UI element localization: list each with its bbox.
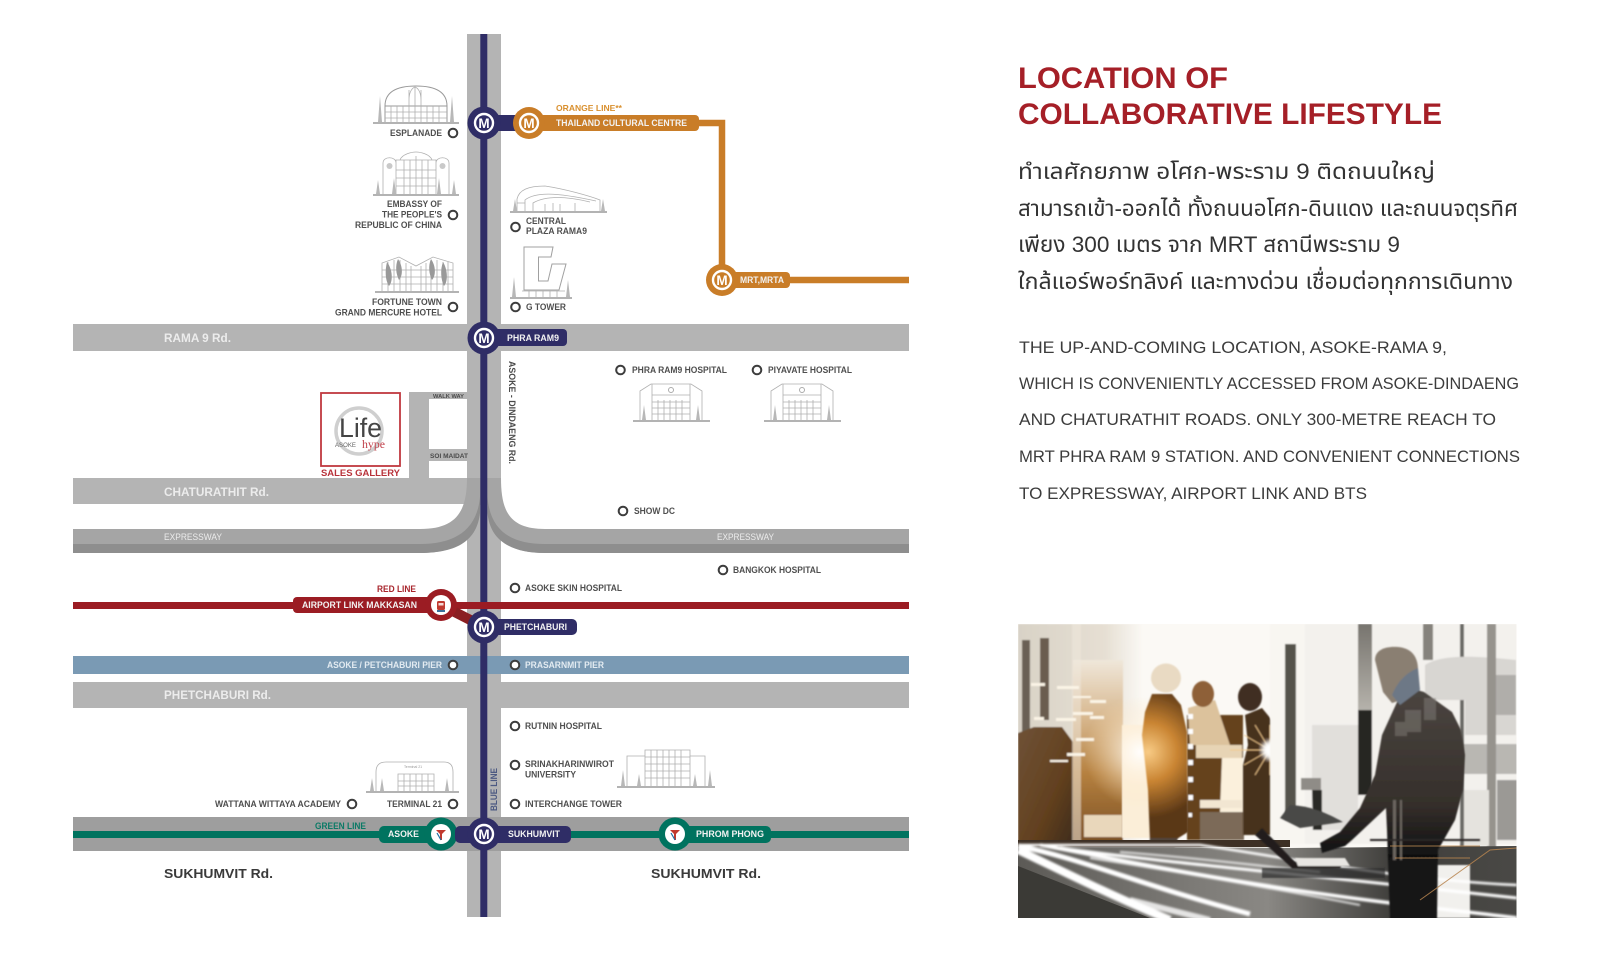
- text block: Thai description: สามารถเข้า-ออกได้ ทั้งถนนอโศก-ดินแดง และถนนจตุรทิศ: [1018, 194, 1518, 222]
- label: Bangkok Hospital: BANGKOK HOSPITAL: [733, 565, 821, 575]
- station: Phrom Phong: PHROM PHONG: [696, 829, 764, 839]
- label: Piyavate Hospital: PIYAVATE HOSPITAL: [768, 365, 852, 375]
- station: Phetchaburi: [468, 610, 577, 644]
- road: Sukhumvit: [73, 817, 909, 851]
- text block: Thai description: [1018, 159, 1518, 295]
- label: Central Plaza Rama9: [511, 216, 587, 236]
- photo: right background: [1270, 624, 1517, 849]
- icon: G Tower building: [510, 247, 572, 298]
- label: Prasarnmit Pier: PRASARNMIT PIER: [525, 660, 604, 670]
- label: Embassy: THE PEOPLE'S: [382, 210, 442, 220]
- station: Sukhumvit: [455, 818, 571, 850]
- photo: man with laptop silhouette: [1320, 647, 1480, 920]
- photo: left skyline: [1018, 624, 1133, 840]
- station: Thailand Cultural Centre: ORANGE LINE**: [556, 103, 623, 113]
- station: Airport Link Makkasan: AIRPORT LINK MAKKASAN: [302, 600, 417, 610]
- station: Airport Link Makkasan: [293, 584, 457, 621]
- station: Phetchaburi: M: [478, 620, 490, 635]
- label: Rutnin Hospital: RUTNIN HOSPITAL: [525, 721, 602, 731]
- label: Asoke Skin Hospital: ASOKE SKIN HOSPITAL: [525, 583, 622, 593]
- photo: laptop on desk: [1255, 805, 1385, 878]
- station: Sukhumvit: SUKHUMVIT: [508, 829, 560, 839]
- line: green line: [73, 831, 909, 838]
- label: Srinakharinwirot University: [511, 759, 614, 780]
- photo: ground with light trails: [1018, 840, 1517, 920]
- callout: sales gallery logo: ASOKE: [335, 443, 356, 449]
- road: walk way and Soi Maidat: [409, 392, 468, 478]
- label: G Tower: G TOWER: [526, 302, 566, 312]
- station: Thailand Cultural Centre: THAILAND CULTURAL CENTRE: [556, 118, 687, 128]
- link: Makkasan to Phetchaburi: [441, 605, 484, 627]
- icon: University building: [617, 750, 715, 787]
- station: Thailand Cultural Centre: [513, 103, 699, 139]
- label: Srinakharinwirot University: UNIVERSITY: [525, 770, 576, 780]
- label: Embassy: EMBASSY OF: [387, 199, 442, 209]
- station: Phrom Phong: [658, 818, 771, 850]
- callout: sales gallery logo: Life: [339, 413, 382, 443]
- text block: Thai description: เพียง 300 เมตร จาก MRT สถานีพระราม 9: [1018, 232, 1400, 257]
- station: Airport Link Makkasan: RED LINE: [377, 584, 416, 594]
- text block: English description: WHICH IS CONVENIENTLY ACCESSED FROM ASOKE-DINDAENG: [1019, 374, 1519, 393]
- station: MRT Esplanade junction: M: [478, 116, 490, 131]
- text block: Thai description: ใกล้แอร์พอร์ทลิงค์ และทางด่วน เชื่อมต่อทุกการเดินทาง: [1018, 266, 1513, 295]
- icon: Piyavate Hospital building: [764, 384, 841, 421]
- road: walk way and Soi Maidat: SOI MAIDAT: [430, 454, 468, 460]
- panel: location map: [73, 34, 909, 917]
- label: Phra Ram9 Hospital: PHRA RAM9 HOSPITAL: [632, 365, 727, 375]
- road: Chaturathit: [73, 478, 467, 504]
- icon: Fortune Town building: [375, 257, 459, 292]
- icon: Terminal 21 building: [366, 762, 459, 792]
- station: MRT MRTA: M: [716, 273, 728, 288]
- label: Wattana Wittaya Academy: WATTANA WITTAYA ACADEMY: [215, 799, 341, 809]
- road: walk way and Soi Maidat: WALK WAY: [433, 394, 464, 400]
- callout: sales gallery logo: hype: [362, 437, 385, 451]
- text block: English description: [1019, 338, 1520, 503]
- station: Phra Ram9: M: [478, 331, 490, 346]
- photo: woman silhouette left: [1141, 663, 1189, 848]
- label: Srinakharinwirot University: SRINAKHARINWIROT: [525, 759, 614, 769]
- label: Fortune Town: FORTUNE TOWN: [372, 297, 442, 307]
- link: Esplanade to Thailand Cultural Centre: [484, 115, 529, 131]
- station: Phra Ram9: [468, 322, 567, 354]
- label: Asoke Petchaburi Pier: ASOKE / PETCHABURI PIER: [327, 660, 442, 670]
- label: Embassy: [355, 199, 457, 230]
- title: [1018, 62, 1442, 131]
- text block: English description: TO EXPRESSWAY, AIRPORT LINK AND BTS: [1019, 484, 1367, 503]
- line label: Blue Line: BLUE LINE: [489, 768, 499, 811]
- road: Phetchaburi: [73, 682, 909, 708]
- label: Fortune Town: GRAND MERCURE HOTEL: [335, 308, 442, 318]
- road label: Sukhumvit left: SUKHUMVIT Rd.: [164, 866, 273, 881]
- photo: person silhouette centre: [1230, 682, 1271, 836]
- photo: middle building with windows: [1187, 681, 1244, 840]
- waterway: pier band: [73, 656, 909, 674]
- label: Terminal 21: TERMINAL 21: [387, 799, 442, 809]
- road: Chaturathit: CHATURATHIT Rd.: [164, 485, 269, 499]
- station: Asoke BTS: GREEN LINE: [315, 821, 366, 831]
- station: MRT MRTA: [706, 264, 790, 296]
- title: LOCATION OF: [1018, 62, 1228, 95]
- text block: English description: AND CHATURATHIT ROADS. ONLY 300-METRE REACH TO: [1019, 410, 1496, 429]
- road: Rama 9: [73, 324, 909, 351]
- line: orange line: [698, 123, 909, 280]
- title: COLLABORATIVE LIFESTYLE: [1018, 98, 1442, 131]
- label: Embassy: REPUBLIC OF CHINA: [355, 220, 442, 230]
- station: Thailand Cultural Centre: M: [523, 116, 535, 131]
- station: MRT Esplanade junction: [468, 106, 500, 140]
- road label: Asoke-Dindaeng: ASOKE - DINDAENG Rd.: [507, 361, 517, 464]
- label: Esplanade: ESPLANADE: [390, 128, 442, 138]
- icon: Embassy building: [373, 152, 459, 195]
- road: Phetchaburi: PHETCHABURI Rd.: [164, 688, 271, 702]
- label: Central Plaza Rama9: CENTRAL: [526, 216, 566, 226]
- station: Phra Ram9: PHRA RAM9: [507, 333, 559, 343]
- road: expressway curves: [73, 478, 909, 553]
- line: red line: [73, 602, 909, 609]
- line: blue line: [480, 34, 487, 917]
- station: Sukhumvit: M: [478, 827, 490, 842]
- label: Interchange Tower: INTERCHANGE TOWER: [525, 799, 622, 809]
- callout: sales gallery logo: SALES GALLERY: [321, 468, 400, 478]
- road: expressway curves: EXPRESSWAY: [717, 532, 774, 542]
- road label: Sukhumvit right: SUKHUMVIT Rd.: [651, 866, 761, 881]
- road: expressway curves: EXPRESSWAY: [164, 532, 222, 542]
- icon: Esplanade building: [373, 86, 459, 123]
- label: Fortune Town: [335, 297, 457, 318]
- icon: Terminal 21 building: Terminal 21: [404, 765, 422, 769]
- callout: sales gallery logo: [321, 393, 400, 478]
- text block: Thai description: ทำเลศักยภาพ อโศก-พระราม 9 ติดถนนใหญ่: [1018, 159, 1435, 184]
- photo: business silhouettes double exposure: [1018, 624, 1517, 920]
- photo: amber scratches: [1390, 846, 1517, 900]
- icon: Central Plaza building: [510, 186, 607, 212]
- station: MRT MRTA: MRT,MRTA: [740, 275, 784, 285]
- photo: centre glow and cream column: [1089, 707, 1150, 839]
- station: Asoke BTS: ASOKE: [388, 829, 419, 839]
- road: Rama 9: RAMA 9 Rd.: [164, 331, 231, 345]
- station: Asoke BTS: [315, 818, 458, 850]
- road: Asoke-Dindaeng vertical: [467, 34, 501, 917]
- label: Show DC: SHOW DC: [634, 506, 675, 516]
- text block: English description: MRT PHRA RAM 9 STATION. AND CONVENIENT CONNECTIONS: [1019, 447, 1520, 466]
- station: Phetchaburi: PHETCHABURI: [504, 622, 567, 632]
- text block: English description: THE UP-AND-COMING LOCATION, ASOKE-RAMA 9,: [1019, 338, 1447, 357]
- icon: Phra Ram9 Hospital building: [633, 384, 710, 421]
- label: Central Plaza Rama9: PLAZA RAMA9: [526, 226, 587, 236]
